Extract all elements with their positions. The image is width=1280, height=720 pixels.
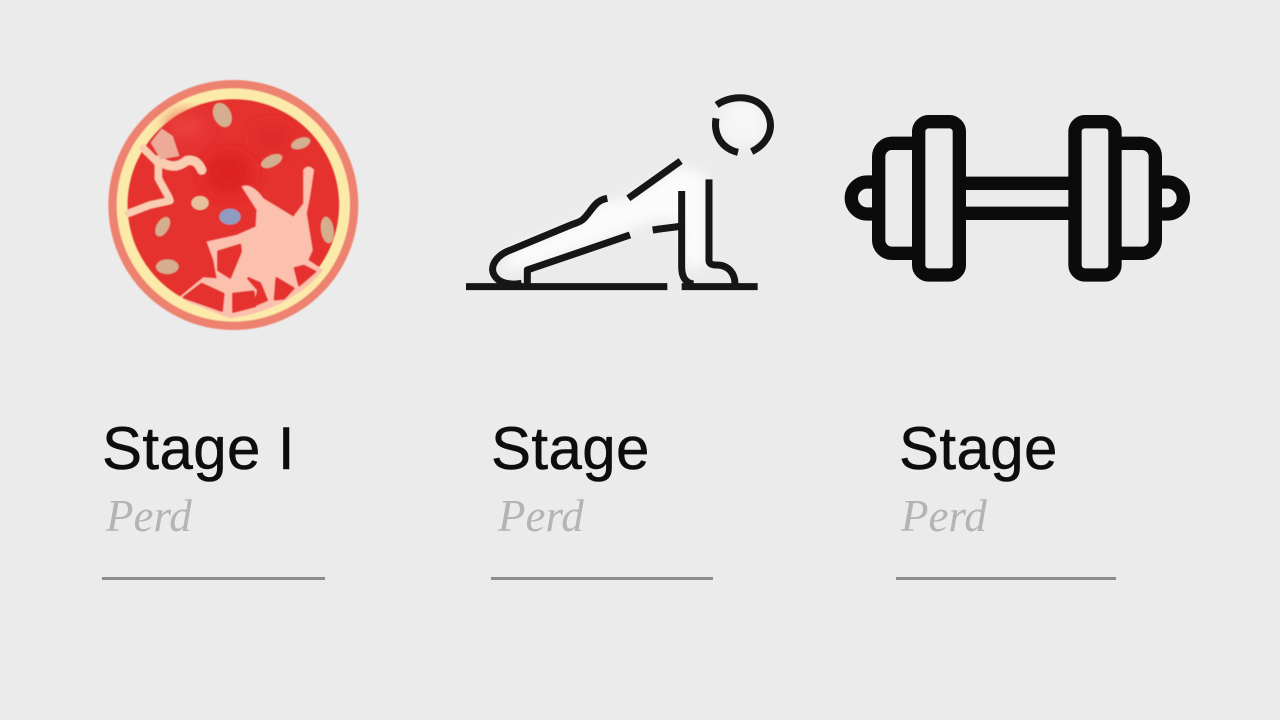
column: stage 2 bbox=[491, 415, 713, 580]
left veins bbox=[128, 148, 202, 213]
subtitle: Perd: Perd bbox=[105, 491, 192, 541]
salmon blob bbox=[180, 167, 323, 318]
heading: Stage I: Stage I bbox=[102, 415, 295, 482]
column: stage 3 bbox=[896, 415, 1116, 580]
column: stage 1 bbox=[102, 415, 325, 580]
subtitle: Perd: Perd bbox=[497, 491, 584, 541]
divider line bbox=[491, 577, 713, 580]
icon: person doing push-up stretch bbox=[466, 98, 770, 287]
heading: Stage: Stage bbox=[491, 415, 650, 482]
divider line bbox=[896, 577, 1116, 580]
icon: dumbbell bbox=[851, 122, 1183, 275]
divider line bbox=[102, 577, 325, 580]
red lobes in blob bbox=[184, 245, 315, 312]
icon: pizza-like tissue cross-section bbox=[108, 80, 358, 330]
subtitle: Perd: Perd bbox=[900, 491, 987, 541]
heading: Stage: Stage bbox=[899, 415, 1058, 482]
